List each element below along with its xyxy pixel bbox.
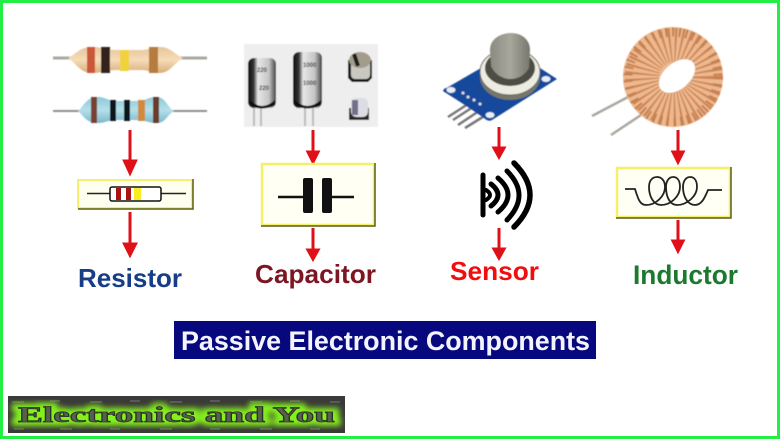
arrow: sensor photo to symbol [494, 127, 504, 157]
resistor photos [53, 47, 207, 123]
label: Resistor: Resistor [78, 263, 182, 293]
photo: capacitors: 220 [259, 86, 270, 92]
banner: Passive Electronic Components: Passive Electronic Components [181, 326, 590, 356]
symbol: sensor waves [483, 163, 530, 227]
photo: capacitors [244, 44, 378, 127]
symbol: inductor [616, 167, 731, 218]
symbol: resistor [78, 179, 193, 209]
logo: Electronics and You [8, 396, 345, 433]
label: Capacitor: Capacitor [255, 259, 376, 289]
arrow: resistor photo to symbol [124, 130, 136, 173]
photo: tan resistor [53, 47, 207, 73]
arrow: capacitor symbol to label [308, 228, 318, 259]
photo: capacitors: 220 [257, 68, 268, 74]
photo: capacitors: 1000 [303, 63, 317, 69]
label: Inductor: Inductor [633, 260, 738, 290]
arrow: sensor symbol to label [494, 228, 504, 258]
arrow: inductor symbol to label [673, 220, 683, 251]
arrow: resistor symbol to label [124, 212, 136, 255]
symbol: capacitor [261, 163, 375, 226]
arrow: inductor photo to symbol [673, 130, 683, 162]
photo: capacitors: 1000 [303, 81, 317, 87]
photo: gas sensor module [443, 33, 557, 128]
logo: Electronics and You: Electronics and You [18, 402, 335, 427]
arrow: capacitor photo to symbol [308, 130, 318, 162]
logo: Electronics and You: Electronics and You [18, 402, 335, 427]
label: Sensor: Sensor [450, 256, 539, 286]
photo: toroidal inductor [592, 27, 723, 135]
photo: blue resistor [53, 97, 207, 123]
